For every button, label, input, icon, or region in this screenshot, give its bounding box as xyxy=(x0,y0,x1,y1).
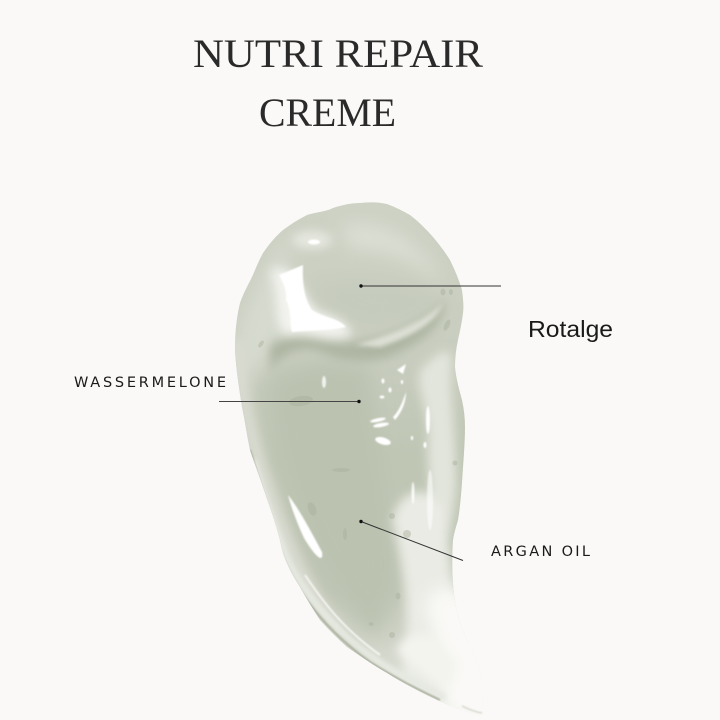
cream base xyxy=(235,202,466,698)
highlight: sparkles xyxy=(322,364,433,530)
dome lower ridge light xyxy=(355,303,442,347)
label: Rotalge: Rotalge xyxy=(528,316,613,342)
upper dome shading xyxy=(238,224,425,374)
label: Argan oil: ARGAN OIL xyxy=(491,544,590,560)
highlight: tail tip xyxy=(462,706,482,713)
cream swatch illustration xyxy=(235,202,467,706)
highlight: top glow xyxy=(292,231,332,249)
callout line: Argan oil xyxy=(359,520,463,560)
highlight: rim streak xyxy=(305,575,380,655)
lower tail fade to background xyxy=(426,582,476,714)
central body shade xyxy=(276,366,385,633)
dome lower ridge shadow xyxy=(266,306,446,367)
cream specular highlights xyxy=(257,231,458,655)
callout line: Wassermelone xyxy=(219,400,361,403)
upper left bright glow xyxy=(270,268,352,339)
highlight: large glossy patch xyxy=(279,265,346,332)
left edge light band xyxy=(235,346,334,618)
title: NUTRI REPAIR xyxy=(193,31,483,76)
highlight: lower left sheen xyxy=(288,495,322,558)
title xyxy=(193,31,483,135)
right column highlight xyxy=(388,350,460,682)
highlight: droplets xyxy=(257,288,458,638)
left edge rim xyxy=(254,460,398,674)
callout line: Rotalge xyxy=(359,284,501,288)
label: Wassermelone: WASSERMELONE xyxy=(74,375,226,391)
title: CREME xyxy=(259,90,396,135)
